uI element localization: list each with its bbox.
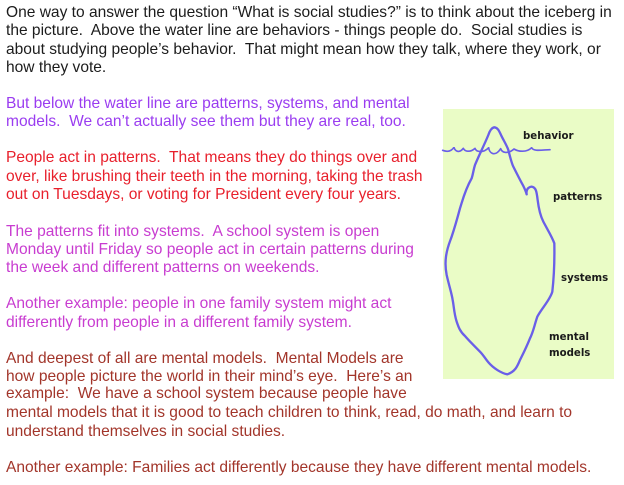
text block: intro — [6, 4, 612, 76]
text block: systems: Monday until Friday so people act in certain patterns during — [6, 241, 414, 258]
text block: intro: about studying people’s behavior. That might mean how they talk, where they work, or — [6, 41, 601, 58]
text block: patterns: out on Tuesdays, or voting for President every four years. — [6, 186, 401, 203]
text block: mental models: example: We have a school system because people have — [6, 385, 407, 402]
label: mental models: models — [549, 348, 590, 359]
text block: patterns: over, like brushing their teeth in the morning, taking the trash — [6, 168, 423, 185]
text block: systems: The patterns fit into systems. A school system is open — [6, 223, 379, 240]
text block: patterns — [6, 149, 423, 203]
text block: intro: the picture. Above the water line are behaviors - things people do. Social studies is — [6, 22, 583, 39]
text block: mental models — [6, 350, 572, 440]
text block: family system example — [6, 295, 392, 331]
text block: mental models: mental models that it is good to teach children to think, read, do math, and learn to — [6, 404, 572, 421]
text block: mental models: And deepest of all are mental models. Mental Models are — [6, 350, 404, 367]
diagram background — [443, 109, 614, 379]
text block: intro: One way to answer the question “What is social studies?” is to think about the iceberg in — [6, 4, 612, 21]
label: behavior: behavior — [523, 131, 574, 142]
iceberg diagram — [443, 109, 614, 379]
text block: families example: Another example: Families act differently because they have different mental models. — [6, 459, 591, 476]
text block: family system example: Another example: people in one family system might act — [6, 295, 392, 312]
text block: patterns: People act in patterns. That means they do things over and — [6, 149, 417, 166]
text block: family system example: differently from people in a different family system. — [6, 314, 352, 331]
text block: systems: the week and different patterns on weekends. — [6, 259, 319, 276]
icon: iceberg outline — [446, 127, 554, 374]
text block: below the water line: models. We can’t actually see them but they are real, too. — [6, 113, 406, 130]
text block: below the water line — [6, 95, 410, 130]
text block: systems — [6, 223, 414, 276]
label: mental models — [549, 332, 590, 359]
label: mental models: mental — [549, 332, 589, 343]
label: systems: systems — [561, 273, 608, 284]
label: patterns: patterns — [553, 192, 602, 203]
text block: intro: how they vote. — [6, 59, 106, 76]
text block: mental models: how people picture the world in their mind’s eye. Here’s an — [6, 368, 412, 385]
text block: mental models: understand themselves in social studies. — [6, 423, 285, 440]
icon: water line — [443, 147, 550, 154]
text block: below the water line: But below the water line are patterns, systems, and mental — [6, 95, 410, 112]
